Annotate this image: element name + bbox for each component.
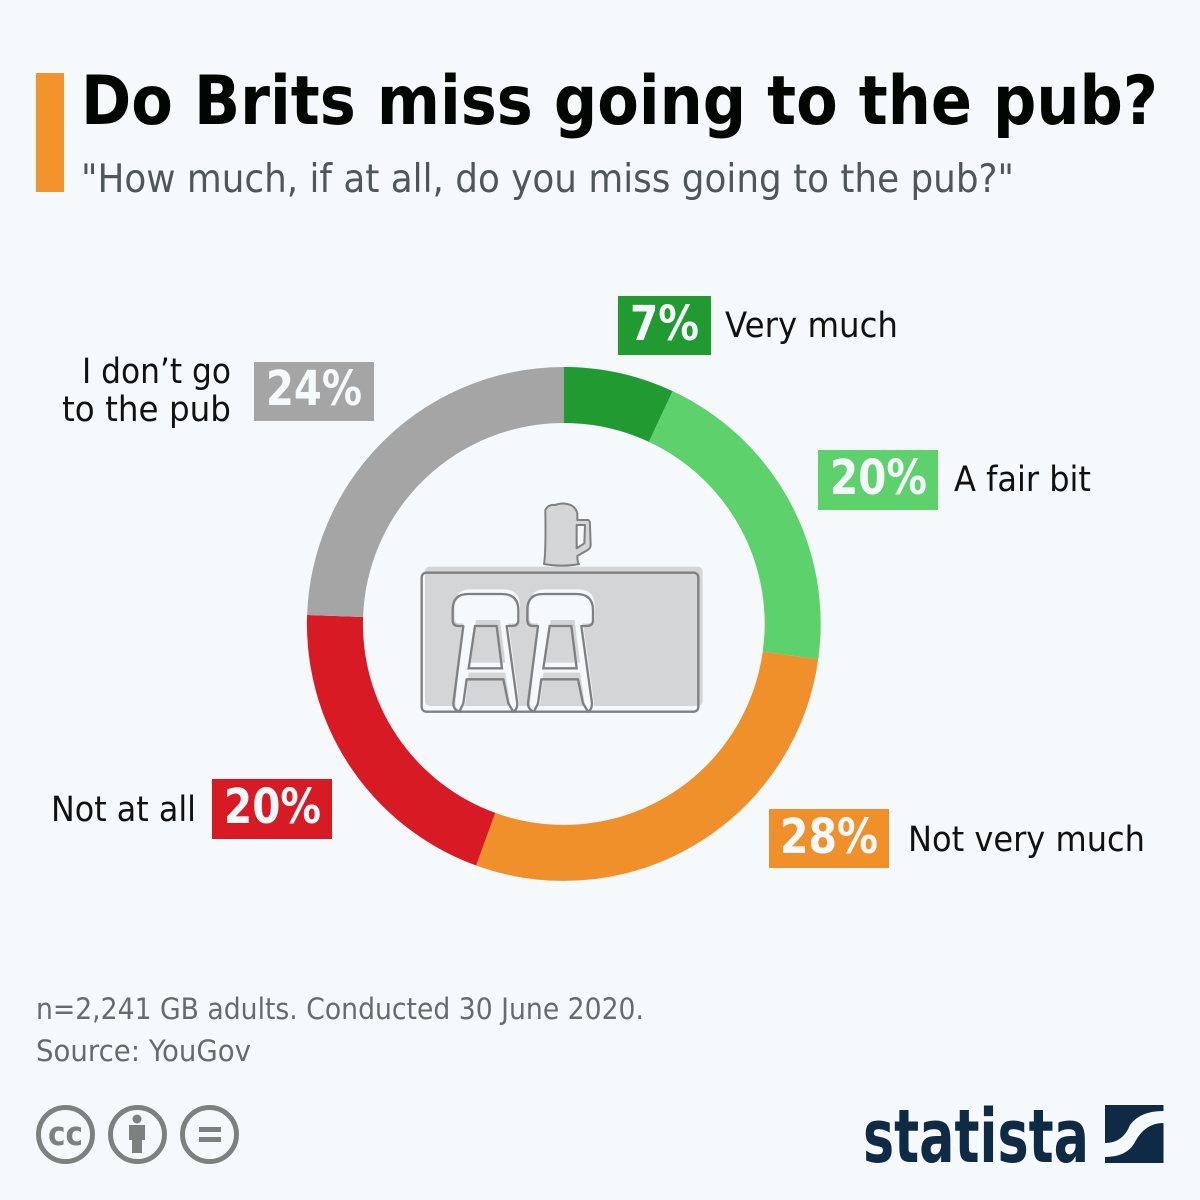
callout: not very much — [769, 809, 1145, 868]
callout: a fair bit — [818, 450, 1091, 510]
icon: creative commons — [38, 1108, 92, 1162]
callout: very much: 7% — [630, 296, 699, 352]
stool two — [527, 589, 595, 712]
header accent bar — [36, 73, 64, 192]
callout: not at all: Not at all — [51, 790, 196, 830]
callout: not at all — [51, 779, 332, 839]
subtitle: "How much, if at all, do you miss going to the pub?" — [81, 157, 1014, 202]
donut chart — [335, 395, 793, 853]
callout: very much — [618, 296, 898, 355]
footnote: sample: n=2,241 GB adults. Conducted 30 June 2020. — [36, 992, 644, 1026]
segment: very much 7% — [564, 395, 661, 416]
stool one — [453, 589, 520, 712]
icon: no derivatives — [182, 1108, 236, 1162]
callout: very much: Very much — [725, 306, 898, 346]
segment: don't go 24% — [335, 395, 564, 616]
statista logo: statista — [863, 1094, 1089, 1180]
segment: a fair bit 20% — [661, 416, 793, 656]
callout: not very much: 28% — [780, 809, 878, 865]
icon: attribution — [110, 1108, 164, 1162]
beer mug — [544, 504, 591, 566]
icon: pub bar with stools and beer mug — [422, 504, 703, 712]
callout: don't go to the pub: I don’t go — [82, 352, 231, 392]
bar counter — [422, 567, 703, 712]
callout: a fair bit: A fair bit — [954, 460, 1091, 500]
callout: not at all: 20% — [224, 779, 321, 835]
segment: not at all 20% — [335, 616, 486, 839]
callout: don't go to the pub: to the pub — [62, 390, 231, 430]
callout: a fair bit: 20% — [830, 450, 927, 506]
icon: creative commons: cc — [48, 1114, 83, 1153]
callout: not very much: Not very much — [908, 820, 1145, 860]
segment: not very much 28% — [486, 656, 790, 853]
footnote: source: Source: YouGov — [36, 1034, 251, 1068]
callout: don't go to the pub — [62, 352, 374, 430]
callout: don't go to the pub: 24% — [266, 361, 362, 417]
